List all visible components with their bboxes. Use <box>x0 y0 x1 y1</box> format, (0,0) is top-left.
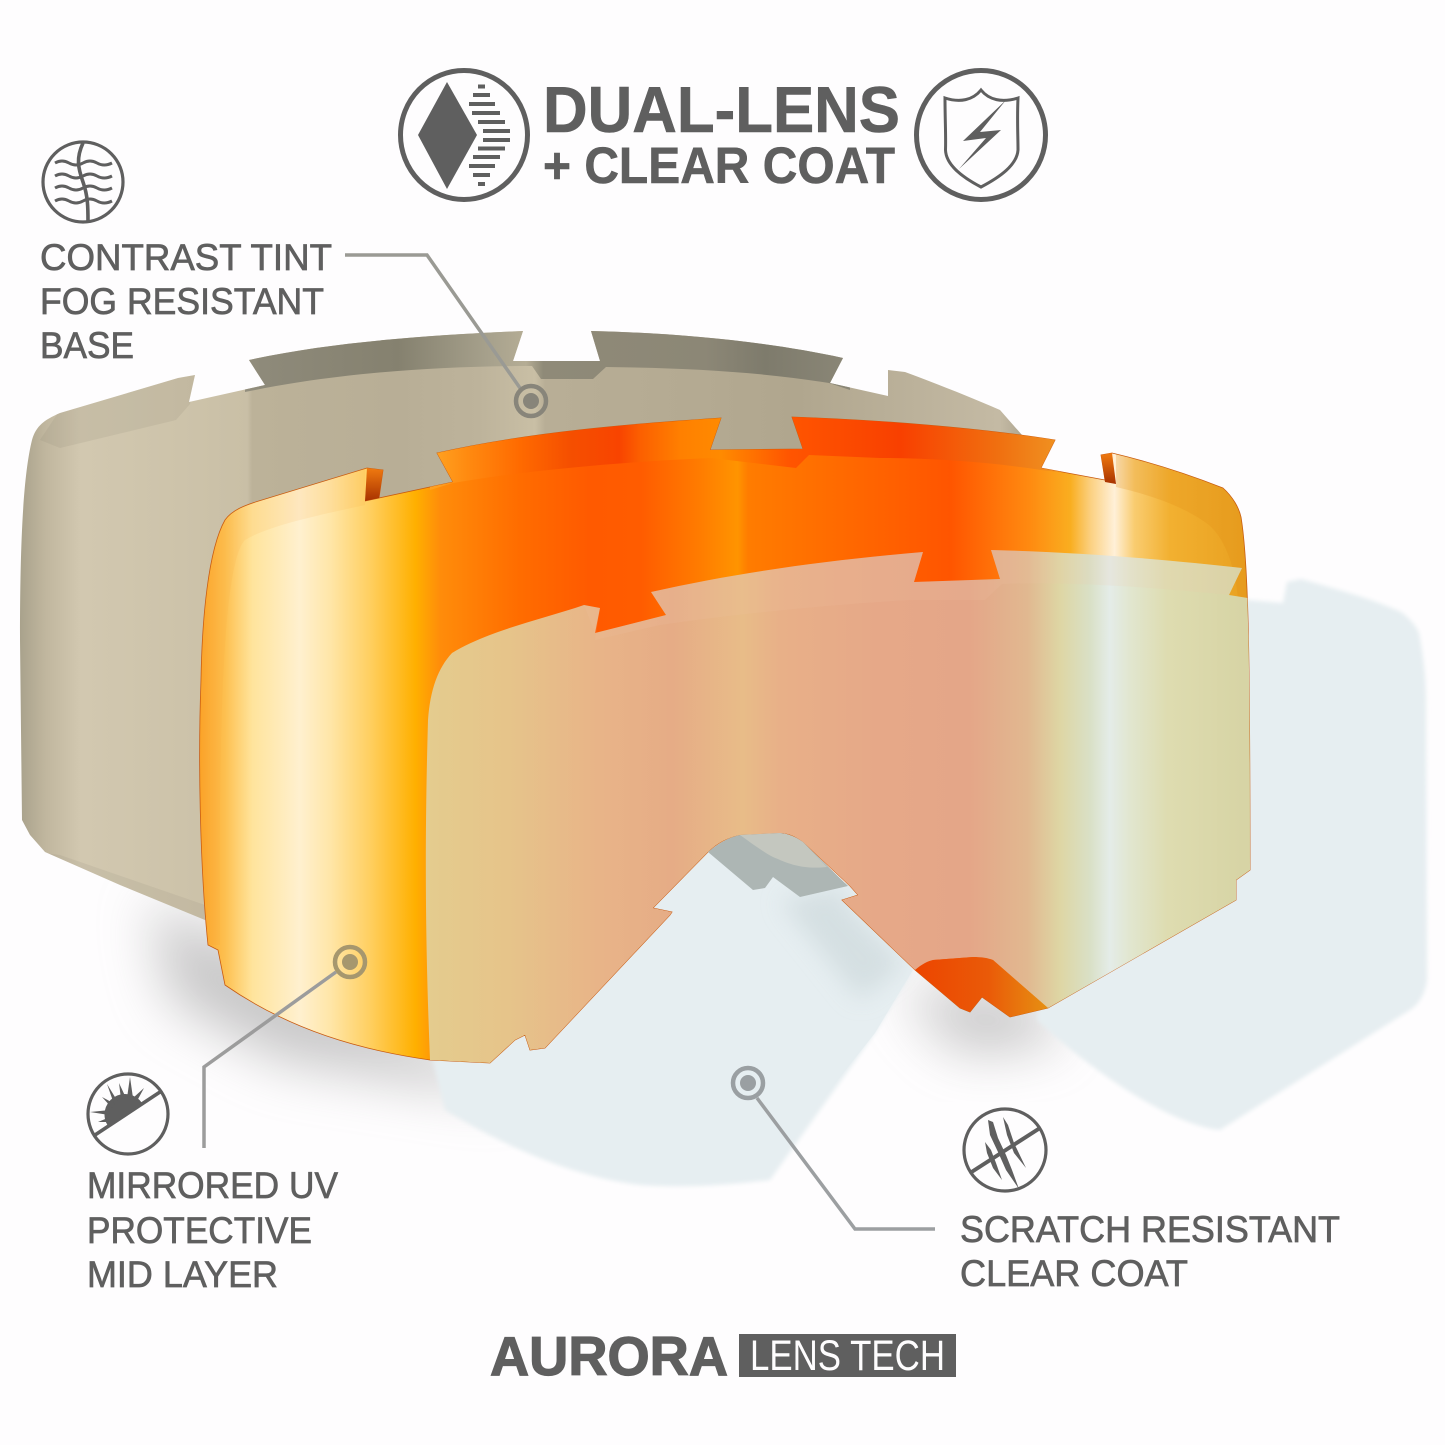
marker: base layer <box>516 386 546 416</box>
brand tag: lens tech: LENS TECH <box>750 1332 945 1380</box>
label: contrast tint: FOG RESISTANT <box>40 281 324 322</box>
clear coat lens: exposed pale blue area <box>430 579 1427 1186</box>
icon: scratch marks <box>964 1109 1046 1191</box>
icon: diamond lens <box>400 70 528 200</box>
callout leader: contrast tint <box>345 255 546 416</box>
marker: clear coat <box>733 1068 763 1098</box>
brand lockup: AURORA <box>490 1325 728 1387</box>
label: mirrored UV <box>87 1165 338 1295</box>
nose gap: mid lens orange corner <box>915 957 1048 1017</box>
icon: shield with lightning bolt <box>916 70 1046 200</box>
label: scratch resistant <box>960 1209 1340 1294</box>
back lens: contrast tint base <box>20 330 1030 925</box>
label: contrast tint <box>40 237 332 366</box>
label: scratch resistant: SCRATCH RESISTANT <box>960 1209 1340 1250</box>
icon: UV sun <box>88 1074 168 1154</box>
nose gap: back lens seen through arch <box>708 833 848 897</box>
soft shadow under lenses <box>150 900 1060 1100</box>
label: mirrored UV: PROTECTIVE <box>87 1210 312 1251</box>
callout leader: mirrored UV <box>204 947 365 1148</box>
icon: fog resistant <box>43 142 123 222</box>
label: contrast tint: CONTRAST TINT <box>40 237 332 278</box>
title: + CLEAR COAT <box>543 137 895 194</box>
label: mirrored UV: MIRRORED UV <box>87 1165 338 1206</box>
label: scratch resistant: CLEAR COAT <box>960 1253 1188 1294</box>
lens stack <box>20 330 1427 1186</box>
label: contrast tint: BASE <box>40 325 134 366</box>
brand lockup <box>490 1325 956 1387</box>
marker: mid layer <box>335 947 365 977</box>
clear coat lens: overlap with mirrored lens <box>426 550 1260 1063</box>
mid lens: mirrored orange layer <box>200 410 1250 1063</box>
label: mirrored UV: MID LAYER <box>87 1254 278 1295</box>
callout leader: clear coat <box>733 1068 935 1229</box>
title: DUAL-LENS <box>543 73 900 146</box>
title <box>543 73 900 194</box>
